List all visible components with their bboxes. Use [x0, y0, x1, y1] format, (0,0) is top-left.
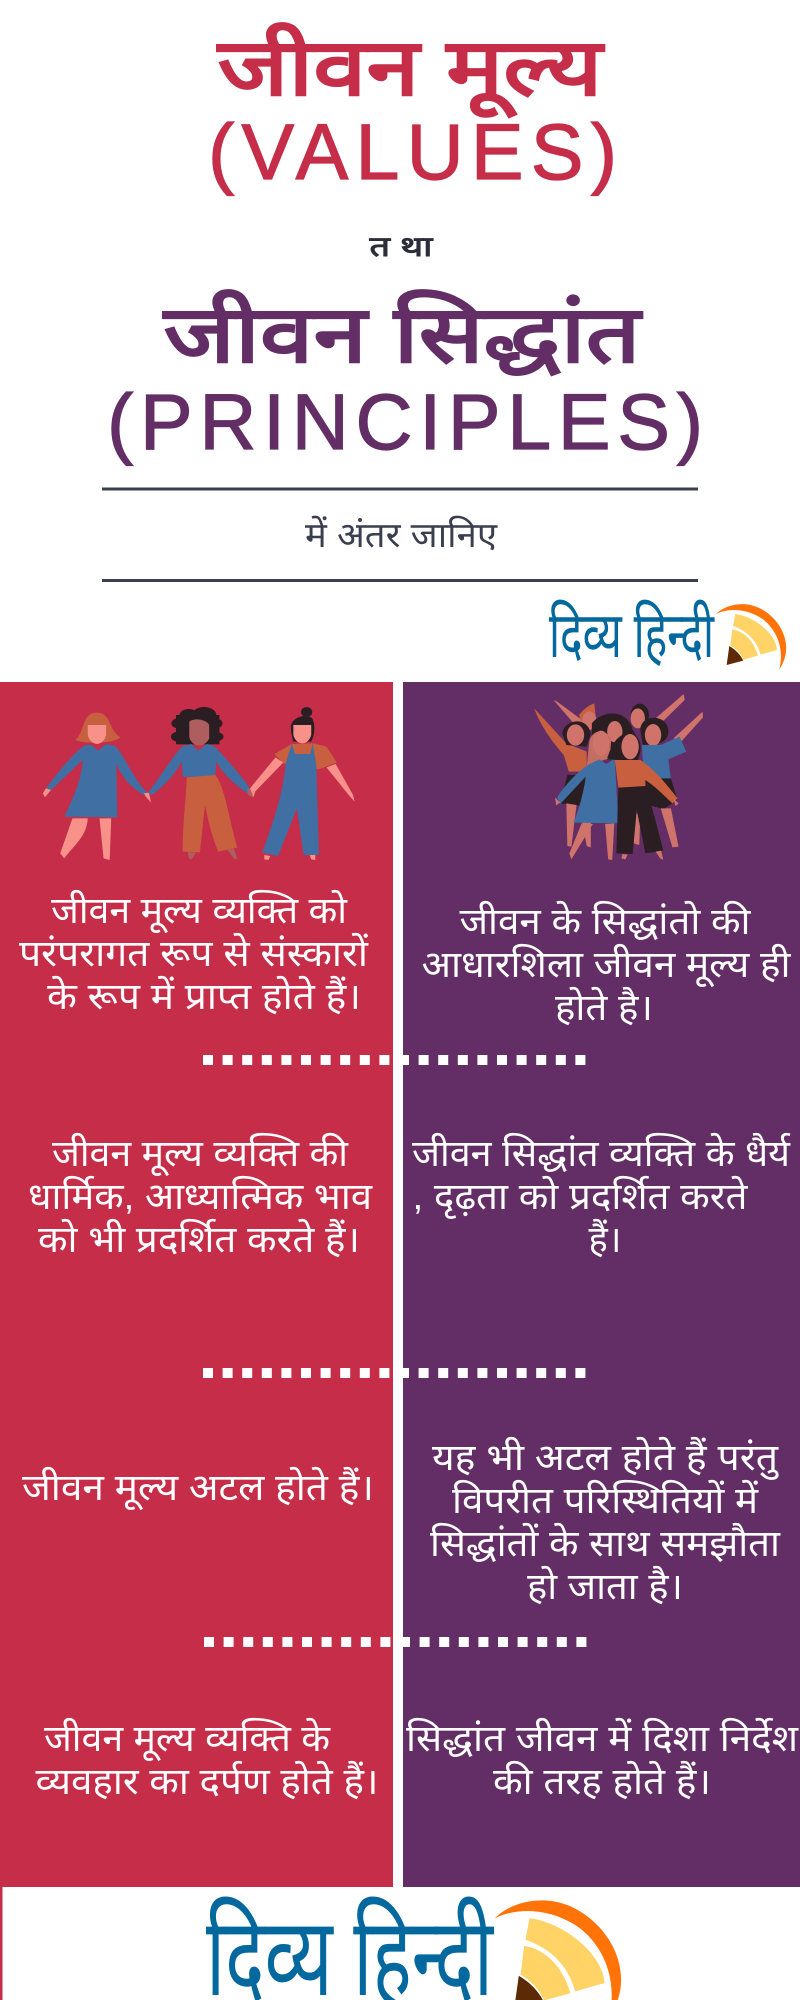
subtitle: में अंतर जानिए — [305, 515, 498, 555]
text: row 4 left: व्यवहार का दर्पण होते हैं। — [36, 1760, 378, 1802]
divider dots 2 — [203, 1368, 586, 1378]
text: row 1 right — [422, 900, 792, 1028]
title: jeevan mulya: जीवन मूल्य — [215, 22, 606, 119]
divider dots 1 — [203, 1055, 586, 1065]
icon: pencil top — [716, 604, 786, 669]
text: row 2 right: हैं। — [588, 1218, 622, 1260]
text: row 2 left: जीवन मूल्य व्यक्ति की — [52, 1132, 349, 1177]
text: row 4 right: की तरह होते हैं। — [493, 1760, 711, 1802]
text: row 1 left — [19, 889, 369, 1017]
text: row 2 right: , दृढ़ता को प्रदर्शित करते — [412, 1175, 748, 1219]
text: row 2 left — [28, 1132, 373, 1260]
text: row 4 left — [36, 1717, 378, 1802]
text: row 2 left: धार्मिक, आध्यात्मिक भाव — [28, 1175, 373, 1217]
rule bottom — [102, 579, 698, 582]
divider dots 3 — [204, 1637, 587, 1647]
text: row 1 left: के रूप में प्राप्त होते हैं। — [47, 975, 361, 1017]
text: row 2 right — [412, 1132, 791, 1260]
title: principles: (PRINCIPLES) — [107, 377, 703, 466]
text: row 3 right: यह भी अटल होते हैं परंतु — [432, 1436, 779, 1480]
text: row 3 right: सिद्धांतों के साथ समझौता — [430, 1522, 781, 1564]
title: values: (VALUES) — [208, 107, 620, 196]
text: row 4 left: जीवन मूल्य व्यक्ति के — [44, 1717, 331, 1762]
text: row 1 left: परंपरागत रूप से संस्कारों — [19, 932, 369, 974]
illustration: three women — [43, 707, 355, 860]
connector word: त था — [368, 231, 435, 262]
text: row 1 right: जीवन के सिद्धांतो की — [460, 900, 752, 942]
text: row 3 right: हो जाता है। — [527, 1565, 683, 1607]
text: row 3 right: विपरीत परिस्थितियों में — [452, 1479, 759, 1521]
logo: top: दिव्य हिन्दी — [549, 599, 715, 671]
text: row 4 right: सिद्धांत जीवन में दिशा निर्देश — [406, 1717, 799, 1759]
left edge line — [0, 1887, 2, 2000]
text: row 4 right — [406, 1717, 799, 1802]
text: row 1 right: होते है। — [555, 986, 653, 1028]
text: row 1 left: जीवन मूल्य व्यक्ति को — [51, 889, 348, 934]
icon: pencil bottom — [495, 1900, 621, 2000]
text: row 3 left: जीवन मूल्य अटल होते हैं। — [22, 1466, 374, 1511]
text: row 1 right: आधारशिला जीवन मूल्य ही — [422, 943, 792, 988]
text: row 3 right — [430, 1436, 781, 1607]
rule top — [102, 488, 698, 490]
illustration: group of women — [534, 694, 703, 860]
title: jeevan siddhant: जीवन सिद्धांत — [161, 289, 643, 379]
text: row 2 left: को भी प्रदर्शित करते हैं। — [38, 1218, 360, 1260]
panel: principles — [403, 682, 800, 1887]
panel: values — [0, 682, 393, 1887]
text: row 2 right: जीवन सिद्धांत व्यक्ति के धैर्य — [412, 1132, 791, 1174]
